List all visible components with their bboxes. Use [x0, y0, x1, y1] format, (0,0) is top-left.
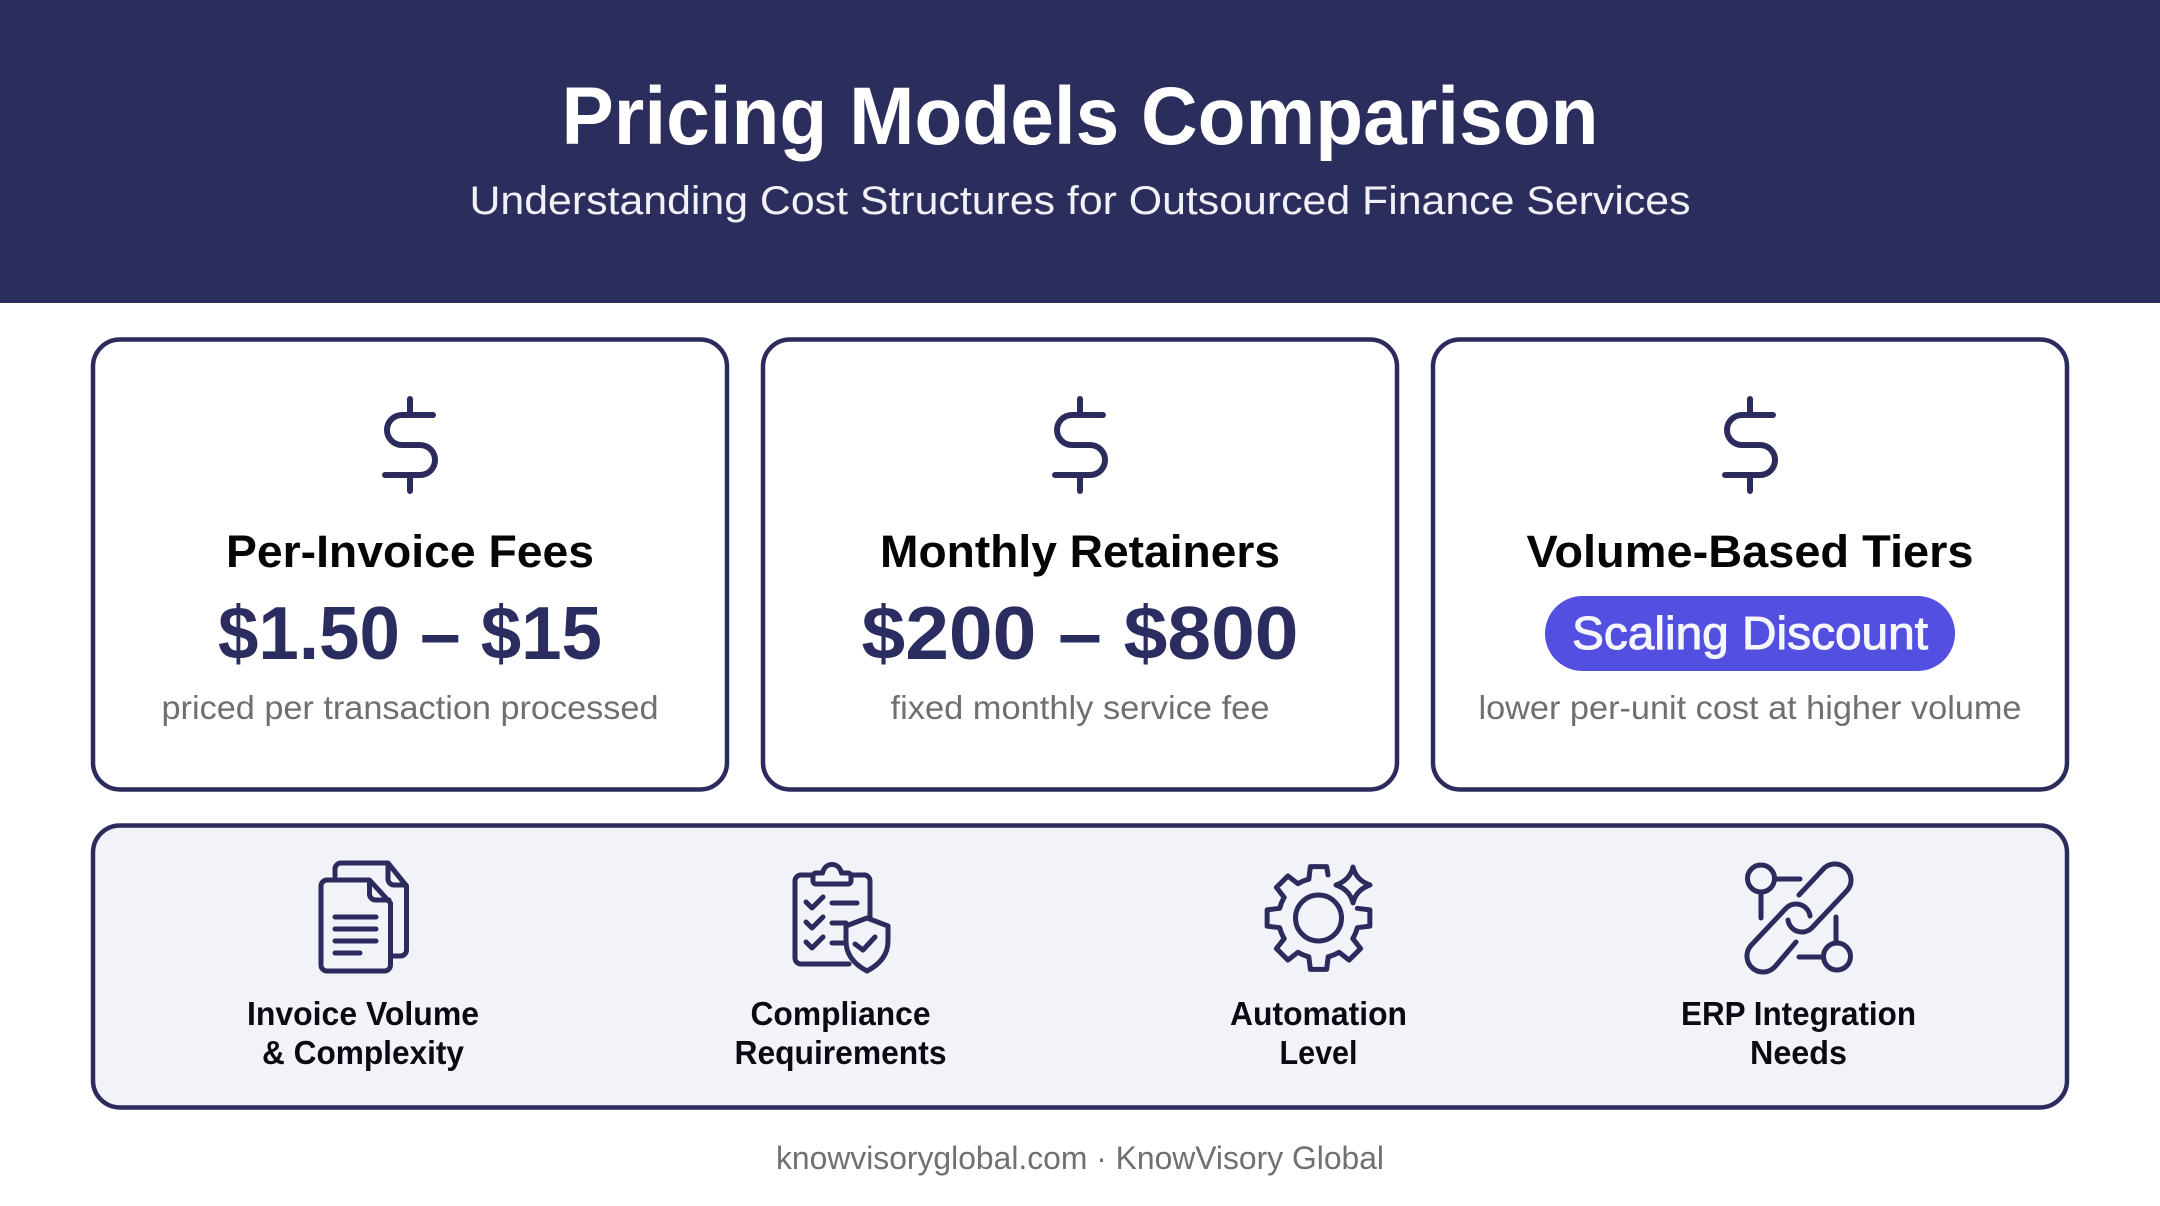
footer: knowvisoryglobal.com · KnowVisory Global [776, 1140, 1384, 1176]
card heading: Per-Invoice Fees [226, 526, 594, 577]
factor label: ERP Integration [1681, 995, 1916, 1032]
panel: per-invoice fees [93, 340, 727, 790]
price range: $1.50 – $15 [218, 591, 602, 675]
icon: stacked documents [321, 863, 406, 971]
card description: fixed monthly service fee [890, 689, 1270, 726]
icon: dollar sign [1055, 399, 1105, 491]
factor label line 2: Needs [1750, 1034, 1847, 1071]
factor label: Invoice Volume [247, 995, 479, 1032]
factor label line 2: Requirements [734, 1034, 946, 1071]
title: Pricing Models Comparison [562, 71, 1598, 162]
factor: invoice volume and complexity [247, 863, 479, 1071]
factor: erp integration needs [1681, 864, 1916, 1071]
icon: clipboard with shield [795, 864, 888, 971]
card description: lower per-unit cost at higher volume [1478, 689, 2022, 726]
factor label: Compliance [750, 995, 930, 1032]
panel: volume-based tiers [1433, 340, 2067, 790]
factor: automation level [1230, 867, 1407, 1071]
card heading: Volume-Based Tiers [1526, 526, 1974, 577]
icon: dollar sign [1725, 399, 1775, 491]
badge: scaling discount [1545, 596, 1955, 671]
factor label line 2: Level [1280, 1034, 1358, 1071]
card description: priced per transaction processed [162, 689, 658, 726]
card heading: Monthly Retainers [880, 526, 1280, 577]
price range: $200 – $800 [862, 591, 1298, 675]
subtitle: Understanding Cost Structures for Outsourced Finance Services [470, 179, 1690, 223]
icon: dollar sign [385, 399, 435, 491]
header banner [0, 0, 2160, 303]
badge: scaling discount: Scaling Discount [1572, 607, 1928, 659]
factor label: Automation [1230, 995, 1407, 1032]
factor: compliance requirements [734, 864, 946, 1071]
factor label line 2: & Complexity [262, 1034, 465, 1071]
icon: chain link with nodes [1747, 864, 1851, 972]
icon: gear with sparkle [1267, 867, 1370, 969]
panel: monthly retainers [763, 340, 1397, 790]
panel: cost factors [93, 826, 2067, 1108]
